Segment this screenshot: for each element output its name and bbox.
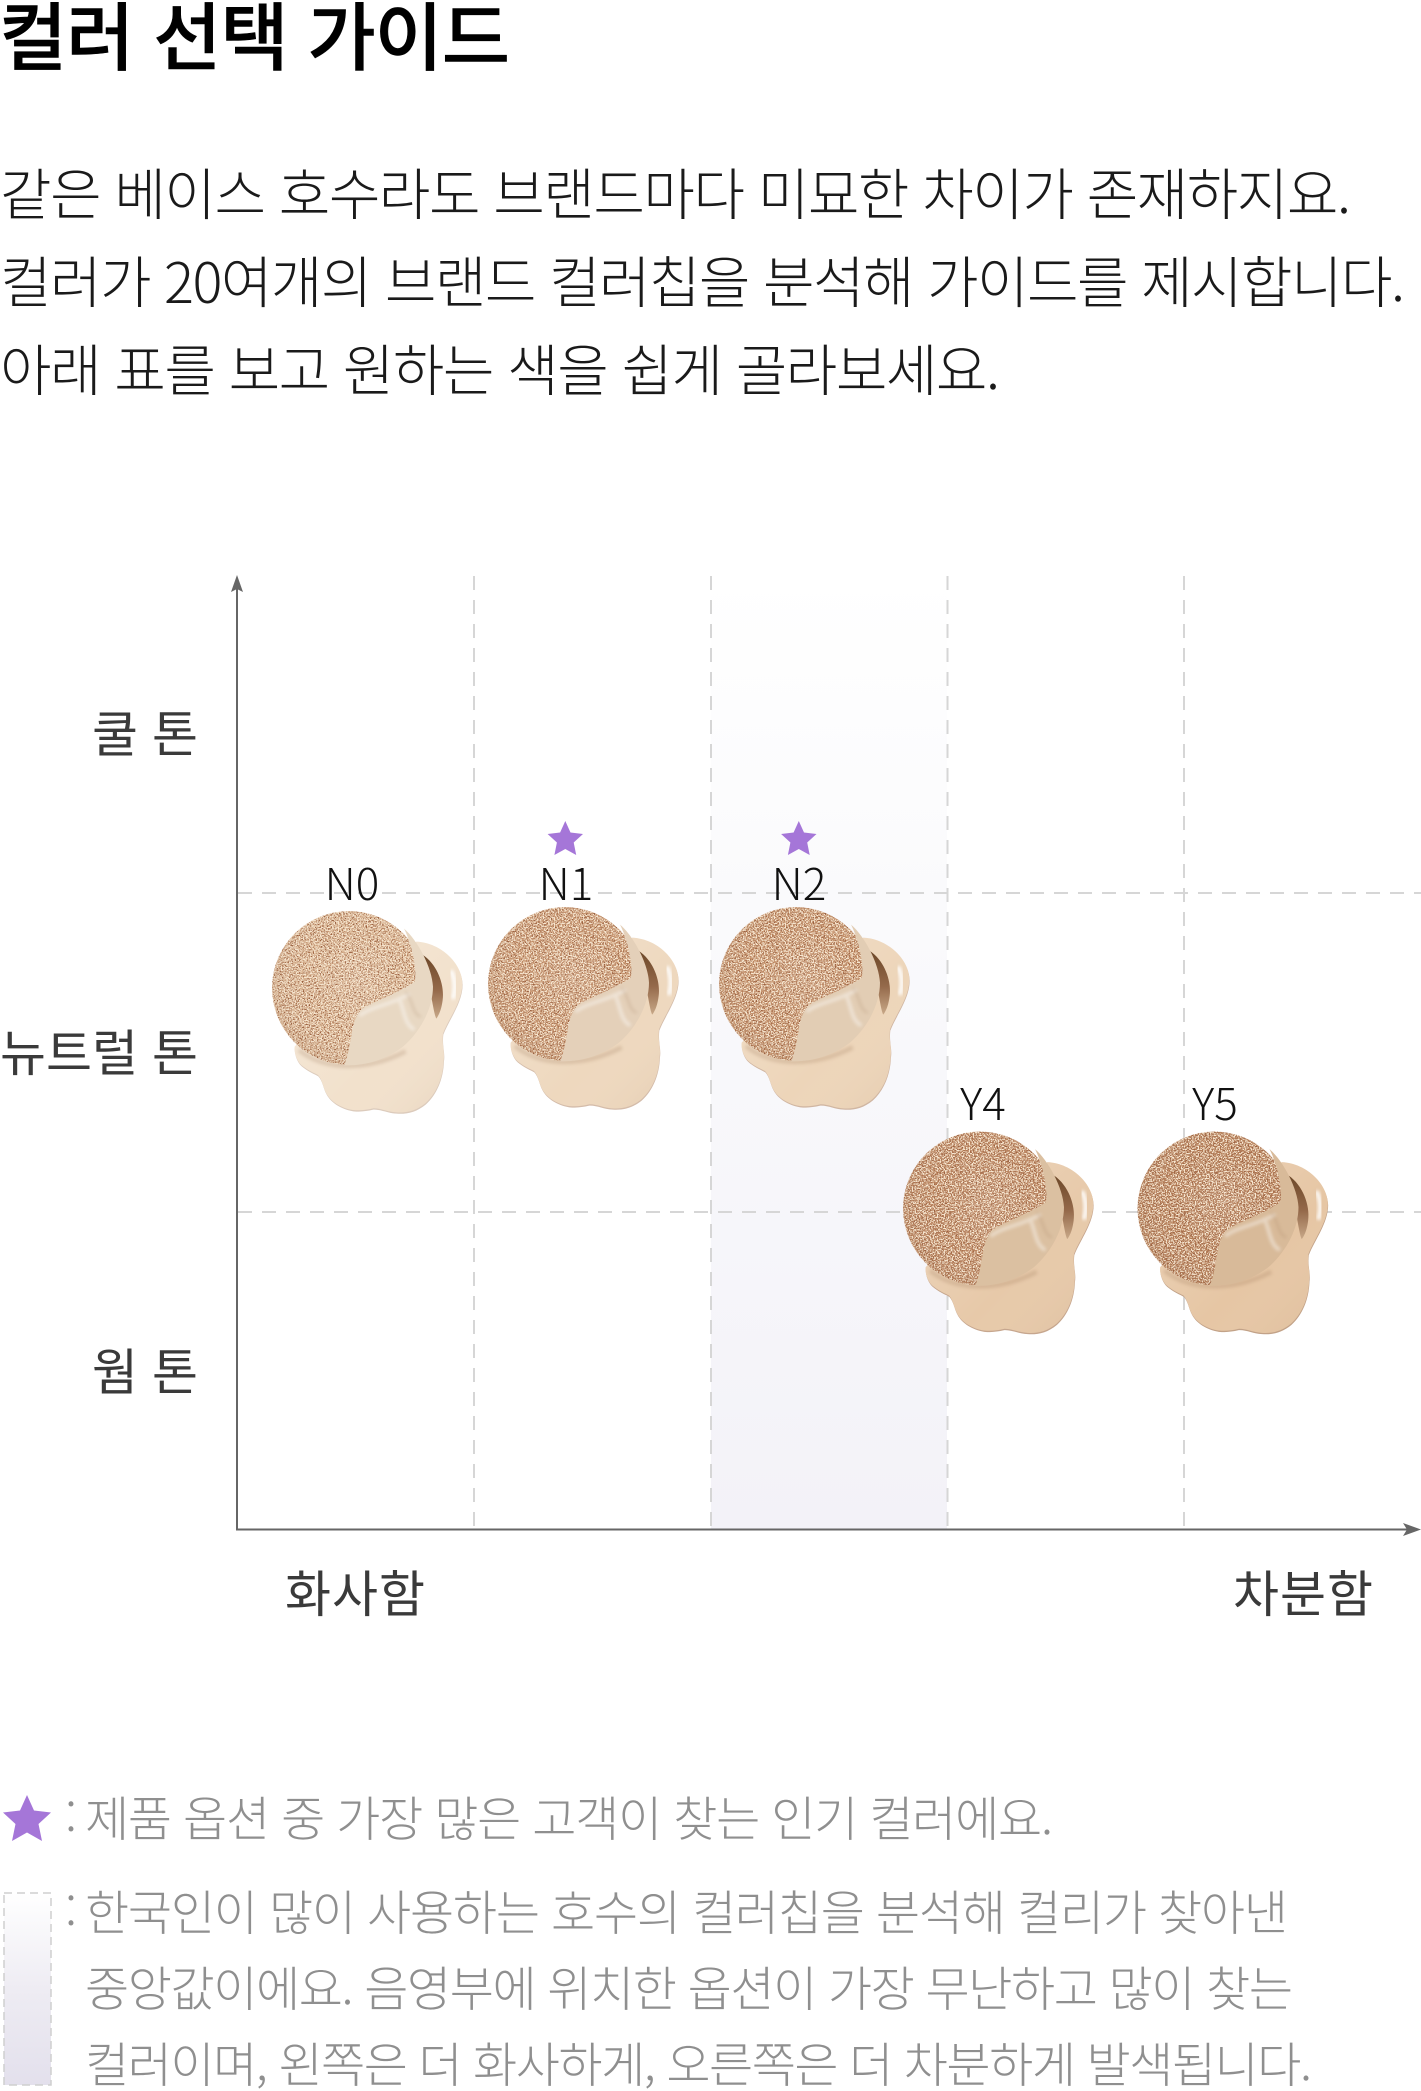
intro text: 같은 베이스 호수라도 브랜드마다 미묘한 차이가 존재하지요. bbox=[0, 151, 1351, 232]
chart: color map bbox=[0, 575, 1421, 1627]
highlighted center band bbox=[711, 576, 947, 1529]
brightness axis labels: 화사함 bbox=[285, 1555, 425, 1627]
swatch: N1 with popularity star: N1 bbox=[539, 849, 593, 913]
legend: center band note: 중앙값이에요. 음영부에 위치한 옵션이 가장 무난하고 많이 찾는 bbox=[85, 1950, 1293, 2020]
icon: legend star bbox=[3, 1795, 51, 1841]
legend: star note: 제품 옵션 중 가장 많은 고객이 찾는 인기 컬러에요. bbox=[85, 1780, 1053, 1850]
swatch: Y4 bbox=[903, 1069, 1094, 1334]
swatch: Y5 bbox=[1138, 1069, 1328, 1334]
brightness axis labels: 차분함 bbox=[1233, 1555, 1373, 1627]
legend: center band note: 한국인이 많이 사용하는 호수의 컬러칩을 분석해 컬리가 찾아낸 bbox=[85, 1874, 1288, 1944]
legend: star note: : bbox=[65, 1780, 77, 1850]
tone axis labels: 웜 톤 bbox=[92, 1333, 198, 1405]
tone axis labels: 쿨 톤 bbox=[92, 695, 198, 767]
swatch: N0 bbox=[272, 849, 463, 1114]
icon: legend band swatch bbox=[4, 1893, 51, 2085]
swatch: N2 with popularity star bbox=[719, 821, 910, 1110]
icon: star N1 bbox=[548, 821, 583, 855]
legend: center band note: : bbox=[65, 1874, 77, 1944]
intro text: 아래 표를 보고 원하는 색을 쉽게 골라보세요. bbox=[0, 327, 1000, 408]
swatch: N1 with popularity star bbox=[488, 821, 679, 1110]
legend: center band note bbox=[4, 1874, 1312, 2091]
horizontal axis arrow bbox=[236, 1523, 1421, 1536]
swatch: N2 with popularity star: N2 bbox=[772, 849, 826, 913]
brightness axis labels bbox=[285, 1555, 1373, 1627]
swatch: N0: N0 bbox=[325, 849, 379, 913]
tone axis labels: 뉴트럴 톤 bbox=[0, 1014, 198, 1086]
intro text bbox=[0, 151, 1405, 408]
tone axis labels bbox=[0, 695, 198, 1405]
vertical axis arrow bbox=[231, 575, 243, 1530]
intro text: 컬러가 20여개의 브랜드 컬러칩을 분석해 가이드를 제시합니다. bbox=[0, 239, 1405, 320]
swatch: Y4: Y4 bbox=[960, 1069, 1006, 1133]
swatch: Y5: Y5 bbox=[1192, 1069, 1238, 1133]
icon: star N2 bbox=[781, 821, 816, 855]
